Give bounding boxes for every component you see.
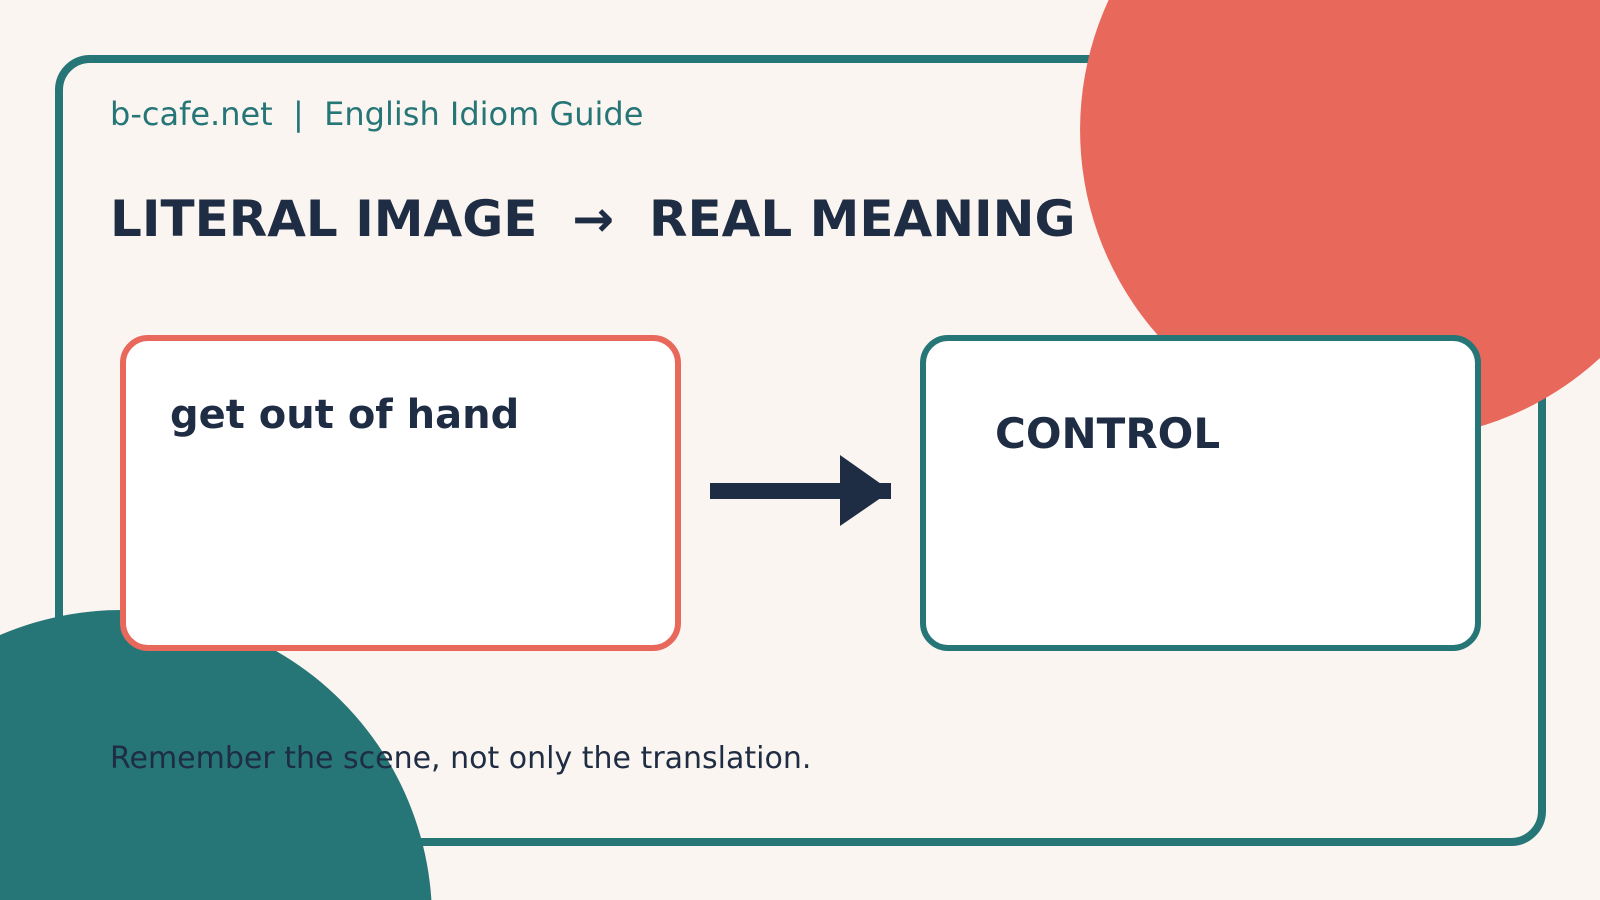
arrow [710, 455, 891, 526]
footer note: Remember the scene, not only the translation. [110, 741, 811, 776]
decorative teal circle, bottom left [0, 610, 431, 900]
idiom text: get out of hand [170, 392, 519, 438]
decorative coral circle, top right [1080, 0, 1600, 440]
panel: idiom [123, 338, 678, 648]
idiom card box [123, 338, 678, 648]
meaning text: CONTROL [995, 409, 1220, 458]
panel: meaning [923, 338, 1478, 648]
title: LITERAL IMAGE → REAL MEANING [110, 190, 1076, 248]
site header: b-cafe.net | English Idiom Guide [110, 95, 643, 133]
meaning card box [923, 338, 1478, 648]
